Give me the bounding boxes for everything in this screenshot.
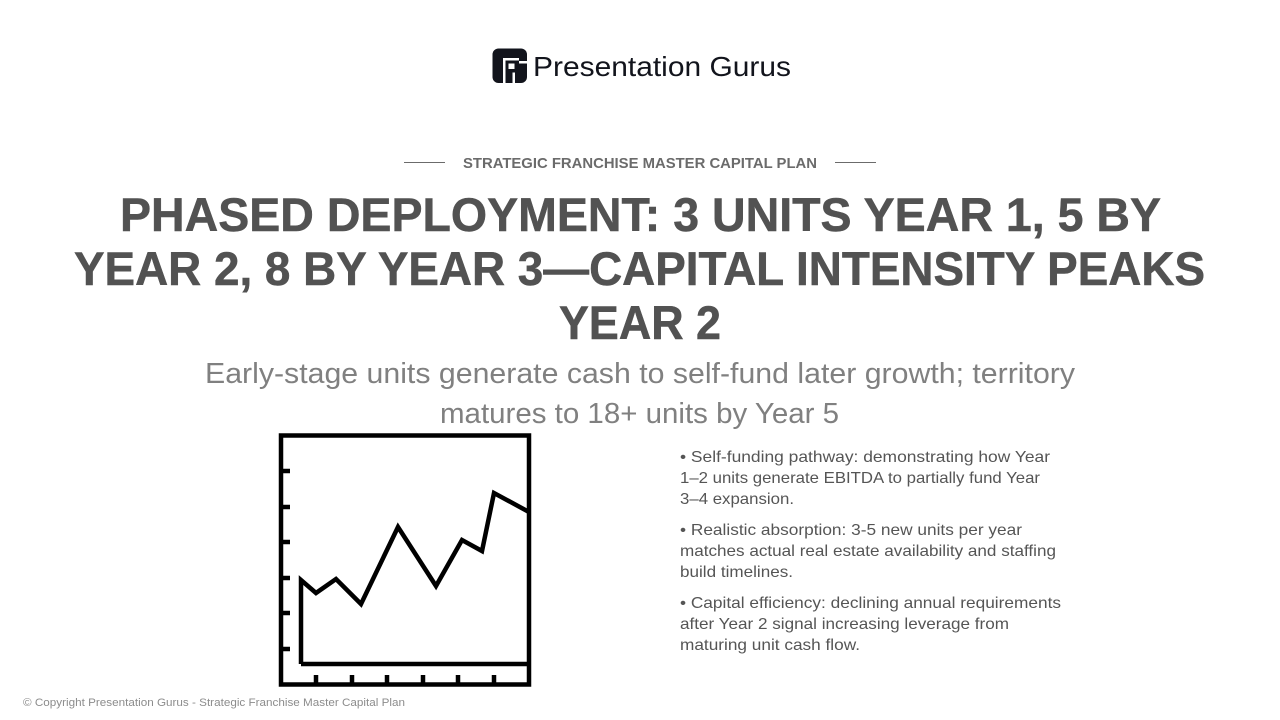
title — [74, 188, 1205, 349]
title: YEAR 2, 8 BY YEAR 3—CAPITAL INTENSITY PEAKS — [74, 242, 1205, 295]
footer copyright: © Copyright Presentation Gurus - Strategic Franchise Master Capital Plan — [23, 697, 405, 709]
bullet: capital efficiency: after Year 2 signal increasing leverage from — [680, 616, 1009, 633]
logo wordmark: Presentation Gurus — [533, 51, 791, 82]
bullet: realistic absorption — [680, 522, 1056, 581]
title: PHASED DEPLOYMENT: 3 UNITS YEAR 1, 5 BY — [120, 188, 1161, 241]
bullet: capital efficiency: maturing unit cash flow. — [680, 637, 860, 654]
bullet: self-funding pathway: 3–4 expansion. — [680, 491, 794, 508]
bullet list — [680, 449, 1061, 654]
bullet: capital efficiency: • Capital efficiency: declining annual requirements — [680, 595, 1061, 612]
bullet: self-funding pathway: • Self-funding pathway: demonstrating how Year — [680, 449, 1051, 466]
eyebrow heading: STRATEGIC FRANCHISE MASTER CAPITAL PLAN — [463, 155, 817, 172]
icon: line chart — [281, 436, 529, 685]
subtitle: matures to 18+ units by Year 5 — [440, 398, 839, 430]
bullet: self-funding pathway: 1–2 units generate EBITDA to partially fund Year — [680, 470, 1041, 487]
bullet: capital efficiency — [680, 595, 1061, 654]
bullet: self-funding pathway — [680, 449, 1051, 508]
bullet: realistic absorption: • Realistic absorption: 3-5 new units per year — [680, 522, 1023, 539]
subtitle — [205, 358, 1076, 430]
icon: logo mark — [492, 48, 527, 83]
title: YEAR 2 — [559, 296, 721, 349]
bullet: realistic absorption: build timelines. — [680, 564, 793, 581]
bullet: realistic absorption: matches actual real estate availability and staffing — [680, 543, 1056, 560]
subtitle: Early-stage units generate cash to self-fund later growth; territory — [205, 358, 1076, 390]
logo — [492, 48, 791, 83]
